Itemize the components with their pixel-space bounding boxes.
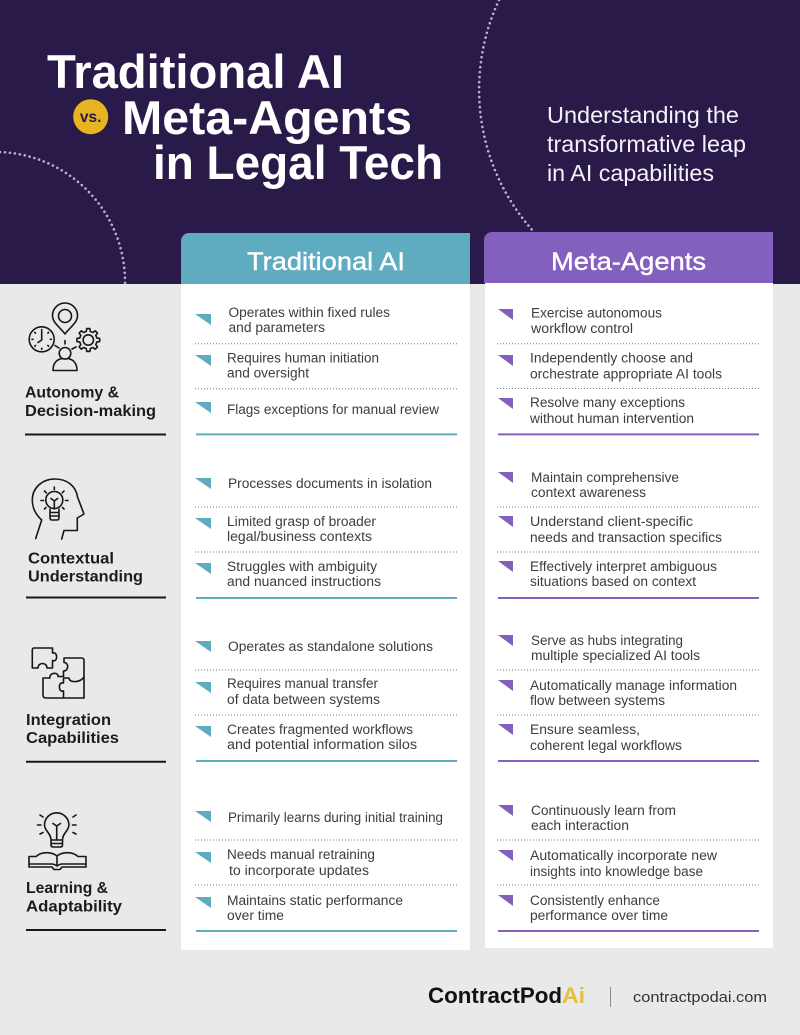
traditional: autonomy items xyxy=(195,305,457,434)
row label: integration xyxy=(26,648,166,762)
meta: learning items: each interaction xyxy=(531,818,629,833)
traditional: autonomy items: Requires human initiation xyxy=(227,350,379,365)
meta: integration items: Serve as hubs integrating xyxy=(531,633,683,648)
meta: autonomy items: Independently choose and xyxy=(530,351,693,366)
row label: integration: Integration xyxy=(26,712,111,729)
traditional: autonomy items: and oversight xyxy=(227,366,309,381)
icon: puzzle pieces xyxy=(32,648,84,698)
traditional: integration items: Creates fragmented workflows xyxy=(227,722,413,737)
footer xyxy=(428,983,767,1008)
meta: learning items xyxy=(497,803,759,931)
column header: Traditional AI: Traditional AI xyxy=(247,248,405,276)
traditional: context items: Limited grasp of broader xyxy=(227,514,377,529)
logo: ContractPod xyxy=(428,983,562,1008)
row label: integration: Capabilities xyxy=(26,730,119,747)
meta: learning items: Automatically incorporate new xyxy=(530,848,717,863)
traditional: learning items xyxy=(195,810,457,931)
traditional: learning items: over time xyxy=(227,908,284,923)
meta: context items: Maintain comprehensive xyxy=(531,470,679,485)
meta: integration items: multiple specialized AI tools xyxy=(531,648,700,663)
meta: learning items: Consistently enhance xyxy=(530,893,660,908)
traditional: context items xyxy=(195,476,457,598)
traditional: context items: Processes documents in isolation xyxy=(228,476,432,491)
meta: integration items: flow between systems xyxy=(530,693,665,708)
traditional: learning items: Maintains static performance xyxy=(227,893,403,908)
column header: Meta-Agents: Meta-Agents xyxy=(551,248,706,276)
title xyxy=(47,45,443,189)
column header: Meta-Agents xyxy=(484,232,773,283)
subtitle xyxy=(547,102,746,186)
traditional: context items: legal/business contexts xyxy=(227,529,372,544)
vs. badge xyxy=(73,99,108,134)
panel: traditional AI column xyxy=(181,233,470,950)
traditional: integration items: Operates as standalone solutions xyxy=(228,639,433,654)
meta: context items: Effectively interpret ambiguous xyxy=(530,559,717,574)
meta: learning items: Continuously learn from xyxy=(531,803,676,818)
meta: integration items: Ensure seamless, xyxy=(530,722,640,737)
meta: integration items: Automatically manage information xyxy=(530,678,737,693)
subtitle: Understanding the xyxy=(547,102,739,128)
traditional: context items: Struggles with ambiguity xyxy=(227,559,377,574)
traditional: learning items: Primarily learns during initial training xyxy=(228,810,443,825)
traditional: integration items xyxy=(195,639,457,761)
row label: context xyxy=(26,479,166,598)
row label: autonomy: Autonomy & xyxy=(25,385,119,402)
meta: learning items: performance over time xyxy=(530,908,668,923)
panel: meta-agents column xyxy=(484,232,773,948)
row label: context: Understanding xyxy=(28,569,143,586)
row label: learning: Learning & xyxy=(26,880,108,897)
icon: light bulb over open book xyxy=(29,813,86,870)
traditional: learning items: to incorporate updates xyxy=(229,863,369,878)
meta: autonomy items: Exercise autonomous xyxy=(531,305,662,320)
traditional: integration items: Requires manual transfer xyxy=(227,676,378,691)
header band xyxy=(0,0,800,284)
traditional: integration items: of data between systems xyxy=(227,692,380,707)
title: in Legal Tech xyxy=(153,136,443,189)
meta: context items: context awareness xyxy=(531,485,646,500)
meta: context items xyxy=(497,470,759,598)
meta: autonomy items: Resolve many exceptions xyxy=(530,395,685,410)
vs. badge: vs. xyxy=(80,109,101,126)
meta: context items: situations based on context xyxy=(530,574,696,589)
row label: autonomy xyxy=(25,303,166,434)
meta: integration items xyxy=(497,633,759,761)
icon: head with light bulb xyxy=(32,479,84,539)
traditional: autonomy items: Operates within fixed rules xyxy=(228,305,390,320)
row label: autonomy: Decision-making xyxy=(25,403,156,420)
row label: learning: Adaptability xyxy=(26,899,122,916)
meta: integration items: coherent legal workflows xyxy=(530,738,682,753)
meta: autonomy items: without human intervention xyxy=(529,411,694,426)
icon: pin, clock, gear and person xyxy=(29,303,100,370)
traditional: learning items: Needs manual retraining xyxy=(227,847,375,862)
meta: autonomy items xyxy=(497,305,759,434)
row label: context: Contextual xyxy=(28,550,114,567)
title: Meta-Agents xyxy=(122,91,412,144)
subtitle: transformative leap xyxy=(547,131,746,157)
traditional: context items: and nuanced instructions xyxy=(227,574,381,589)
logo: Ai xyxy=(562,983,585,1008)
subtitle: in AI capabilities xyxy=(547,160,714,186)
row label: learning xyxy=(26,813,166,930)
meta: autonomy items: workflow control xyxy=(530,321,633,336)
meta: learning items: insights into knowledge base xyxy=(530,864,703,879)
meta: autonomy items: orchestrate appropriate AI tools xyxy=(530,367,722,382)
traditional: integration items: and potential information silos xyxy=(227,737,417,752)
column header: Traditional AI xyxy=(181,233,470,284)
meta: context items: needs and transaction specifics xyxy=(530,530,722,545)
footer: contractpodai.com xyxy=(633,990,767,1006)
traditional: autonomy items: and parameters xyxy=(228,320,325,335)
traditional: autonomy items: Flags exceptions for manual review xyxy=(227,402,439,417)
meta: context items: Understand client-specific xyxy=(530,514,693,529)
title: Traditional AI xyxy=(47,45,344,98)
